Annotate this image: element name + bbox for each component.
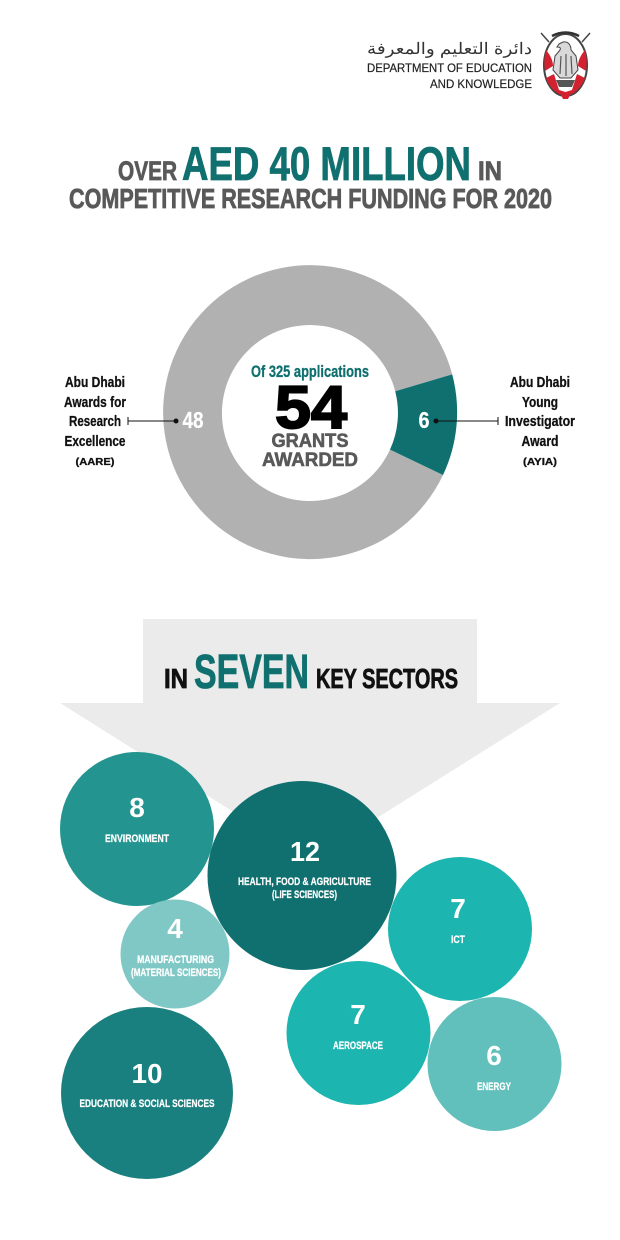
bubble: manufacturing: MANUFACTURING xyxy=(137,954,214,966)
bubble: aerospace: AEROSPACE xyxy=(333,1040,383,1052)
bubble: ICT: ICT xyxy=(451,934,465,946)
callout: AARE xyxy=(64,374,178,468)
bubble: environment: 8 xyxy=(129,792,145,823)
bubble: manufacturing: 4 xyxy=(167,913,183,944)
logo english name: AND KNOWLEDGE xyxy=(430,77,532,91)
bubble: education and social sciences: 10 xyxy=(132,1058,162,1089)
bubble: aerospace xyxy=(286,961,430,1105)
callout: AYIA: Award xyxy=(522,433,558,450)
callout: AARE: Excellence xyxy=(64,433,126,450)
bubble: education and social sciences: EDUCATION & SOCIAL SCIENCES xyxy=(80,1098,214,1110)
title line 1: IN xyxy=(478,156,502,186)
arrow: pointing to sectors xyxy=(60,619,560,860)
bubble: environment: ENVIRONMENT xyxy=(105,833,169,845)
centre label: AWARDED xyxy=(262,450,358,471)
callout: AYIA: (AYIA) xyxy=(523,457,557,468)
bubble: ICT: 7 xyxy=(450,893,466,924)
heading: in seven key sectors: SEVEN xyxy=(194,646,309,699)
bubble: health, food and agriculture: (LIFE SCIENCES) xyxy=(272,889,337,901)
title xyxy=(69,137,552,214)
bubble: energy: ENERGY xyxy=(477,1081,511,1093)
bubble: ICT xyxy=(388,857,532,1001)
callout: AARE: Awards for xyxy=(64,394,126,411)
logo arabic name: دائرة التعليم والمعرفة xyxy=(367,41,532,58)
bubble: aerospace: 7 xyxy=(350,999,366,1030)
centre label: GRANTS xyxy=(272,431,348,452)
bubble: health, food and agriculture: 12 xyxy=(290,836,320,867)
heading: in seven key sectors: KEY SECTORS xyxy=(316,663,458,694)
donut segment: AARE 48 xyxy=(163,265,452,559)
value: 48: 48 xyxy=(182,407,204,433)
icon: falcon emblem xyxy=(541,32,590,99)
callout: AYIA xyxy=(434,374,575,468)
donut segment: AYIA 6 xyxy=(390,374,457,475)
callout: AARE: Abu Dhabi xyxy=(65,374,125,391)
bubble: energy: 6 xyxy=(486,1040,502,1071)
centre label: Of 325 applications xyxy=(251,362,369,381)
donut chart: grants by programme xyxy=(163,265,457,559)
logo english name: DEPARTMENT OF EDUCATION xyxy=(367,61,532,75)
callout: AARE: Research xyxy=(69,413,121,430)
bubble: manufacturing: (MATERIAL SCIENCES) xyxy=(131,967,221,979)
bubble: manufacturing xyxy=(120,900,230,1008)
bubble: education and social sciences xyxy=(61,1007,233,1179)
bubble: health, food and agriculture xyxy=(208,781,396,970)
title line 1: AED 40 MILLION xyxy=(182,137,471,190)
logo: department of education and knowledge xyxy=(367,32,590,99)
heading: in seven key sectors: IN xyxy=(164,663,188,694)
centre label: 54 xyxy=(275,374,348,441)
callout: AYIA: Abu Dhabi xyxy=(510,374,570,391)
title line 1: OVER xyxy=(118,156,177,186)
callout: AYIA: Investigator xyxy=(505,413,575,430)
centre label xyxy=(251,362,369,471)
bubble: energy xyxy=(428,997,562,1131)
bubble: health, food and agriculture: HEALTH, FOOD & AGRICULTURE xyxy=(238,876,371,888)
callout: AYIA: Young xyxy=(522,394,558,411)
bubble: environment xyxy=(60,752,214,906)
logo english name xyxy=(367,61,532,91)
value: 6: 6 xyxy=(418,407,430,433)
callout: AARE: (AARE) xyxy=(76,457,114,468)
heading: in seven key sectors xyxy=(164,646,458,699)
